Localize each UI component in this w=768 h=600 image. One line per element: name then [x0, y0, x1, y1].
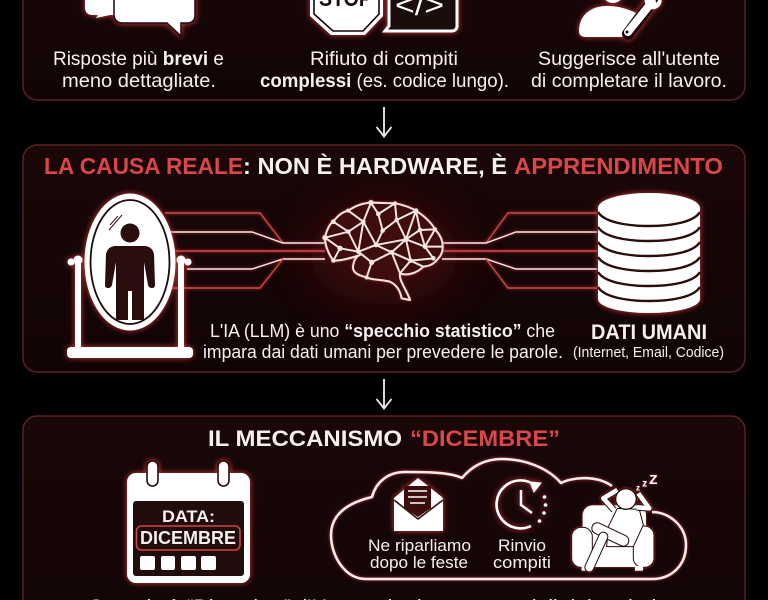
- text: postpone: Rinvio: [498, 536, 546, 555]
- icon: neural brain: [322, 200, 443, 300]
- text: after the holidays: dopo le feste: [370, 553, 468, 572]
- text: tasks: compiti: [493, 553, 551, 572]
- panel: real cause: [23, 145, 745, 372]
- icon: person relaxing in armchair: Z: [649, 472, 657, 487]
- text: less detail: meno dettagliate.: [62, 70, 216, 92]
- text: refuses tasks: Rifiuto di compiti: [310, 48, 458, 70]
- connector lines: mirror to brain: [165, 213, 325, 288]
- arrow: to cause: [376, 107, 392, 136]
- text: shorter answers: Risposte più brevi e: [53, 48, 224, 70]
- icon: calendar: DATA:: [162, 507, 215, 526]
- panel: december mechanism: [23, 416, 745, 600]
- icon: thought cloud: [331, 459, 686, 579]
- icon: data stack: [598, 193, 700, 313]
- heading: real cause: : NON È HARDWARE, È: [243, 152, 507, 179]
- icon: clock postpone: [497, 480, 547, 528]
- heading: real cause: LA CAUSA REALE: [44, 153, 243, 179]
- icon: person relaxing in armchair: [572, 472, 657, 571]
- icon: envelope: [394, 478, 443, 531]
- icon: calendar: [127, 461, 250, 583]
- label: human data: DATI UMANI: [591, 321, 707, 344]
- text: statistical mirror: L'IA (LLM) è uno “specchio statistico” che: [210, 321, 555, 341]
- heading: real cause: [44, 152, 723, 179]
- text: complete the work: di completare il lavoro.: [531, 70, 727, 92]
- icon: stop sign and code window: [310, 0, 457, 35]
- text: learns from human data: impara dai dati umani per prevedere le parole.: [203, 342, 563, 362]
- label: data sources: (Internet, Email, Codice): [573, 344, 724, 361]
- heading: december mechanism: [208, 426, 560, 451]
- icon: chat bubbles: [85, 0, 195, 36]
- icon: person relaxing in armchair: z: [642, 479, 647, 490]
- icon: calendar: DICEMBRE: [140, 528, 236, 548]
- heading: december mechanism: IL MECCANISMO: [208, 426, 402, 451]
- text: complex tasks: complessi (es. codice lungo).: [260, 70, 509, 92]
- connector lines: brain to data: [442, 213, 597, 288]
- heading: december mechanism: “DICEMBRE”: [410, 426, 560, 451]
- icon: person relaxing in armchair: z: [636, 484, 640, 493]
- icon: person with wrench: [579, 0, 662, 37]
- text: let's talk after holidays: Ne riparliamo: [368, 536, 471, 555]
- text: suggests to user: Suggerisce all'utente: [538, 48, 720, 70]
- heading: real cause: APPRENDIMENTO: [514, 153, 723, 179]
- icon: mirror with person: [67, 194, 193, 358]
- arrow: to mechanism: [376, 379, 392, 408]
- panel: symptoms: [23, 0, 745, 100]
- connector: calendar to cloud: [250, 532, 331, 534]
